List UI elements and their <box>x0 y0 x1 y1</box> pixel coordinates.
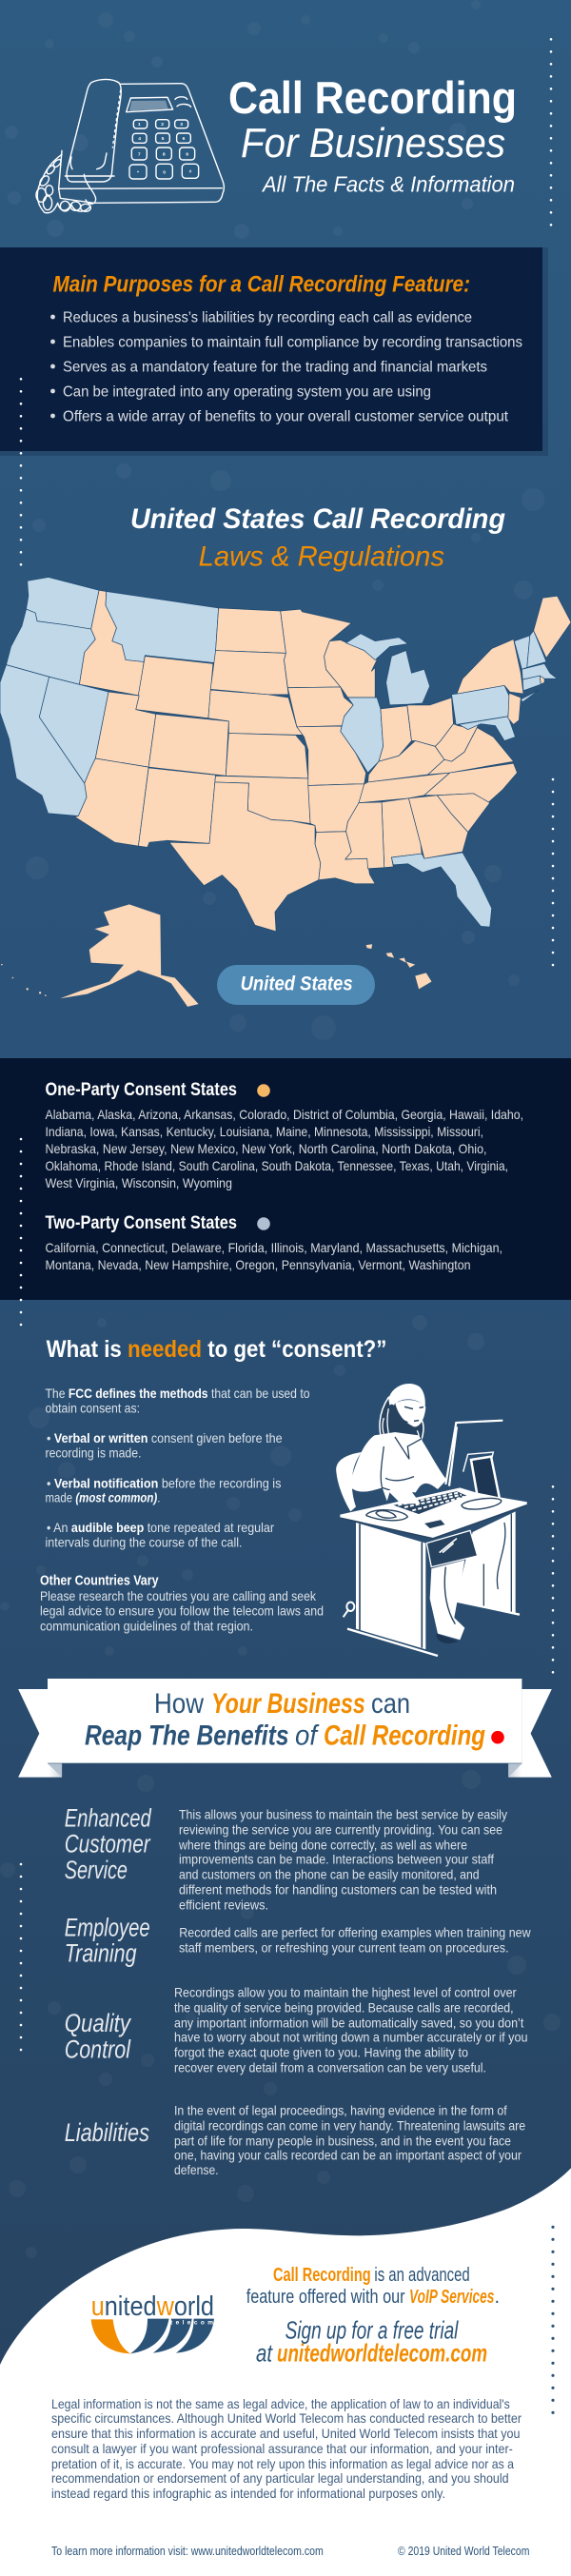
text block: other countries: Other Countries Vary <box>40 1574 158 1589</box>
legal disclaimer: specific circumstances. Although United World Telecom has conducted research to better <box>51 2410 522 2426</box>
benefit: quality control: have to worry about not writing down a number accurately or if you <box>174 2029 527 2044</box>
title: For Businesses <box>241 120 505 167</box>
panel: main purposes <box>0 247 548 456</box>
keypad: * <box>137 169 139 175</box>
two-party heading: Two-Party Consent States <box>46 1213 237 1233</box>
skirt and legs <box>426 1530 478 1643</box>
heading: consent: What is needed to get “consent?” <box>47 1336 386 1363</box>
keypad: 6 <box>183 136 186 142</box>
call to action: VoIP Services <box>409 2287 494 2308</box>
legal disclaimer: instead regard this infographic as intended for informational purposes only. <box>51 2486 445 2501</box>
benefit: quality control: the quality of service being provided. Because calls are recorded, <box>174 1999 514 2015</box>
coiled cord <box>36 154 96 213</box>
benefit: enhanced customer service: Service <box>65 1856 128 1884</box>
pill label: United States <box>217 965 375 1005</box>
heading: US laws: Laws & Regulations <box>199 541 444 573</box>
pill label: United States: United States <box>241 973 353 995</box>
Alaska <box>60 904 199 1007</box>
benefit: quality control: Recordings allow you to maintain the highest level of control over <box>174 1984 517 1999</box>
text block: FCC methods: • Verbal or written consent given before the <box>47 1430 283 1445</box>
map of United States <box>0 577 571 1007</box>
heading: US laws: United States Call Recording <box>130 503 505 535</box>
text block: other countries: communication guidelines of that region. <box>40 1618 253 1633</box>
text block: other countries: Please research the coutries you are calling and seek <box>40 1588 317 1603</box>
benefit: employee training <box>65 1913 531 1968</box>
title: Call Recording <box>228 72 517 123</box>
two-party list <box>46 1240 502 1272</box>
icon: desk telephone <box>36 79 224 213</box>
Hawaii <box>366 944 431 989</box>
legal disclaimer: ensure that this information is accurate and useful, United World Telecom insists that you <box>51 2426 520 2441</box>
banner heading: Your Business <box>211 1688 365 1720</box>
text block: FCC methods: • Verbal notification before the recording is <box>47 1475 281 1490</box>
small desk item <box>344 1603 354 1617</box>
text block: FCC methods <box>46 1386 310 1550</box>
woman <box>349 1384 446 1504</box>
banner heading: How <box>154 1688 204 1720</box>
one-party list: Nebraska, New Jersey, New Mexico, New York, North Carolina, North Dakota, Ohio, <box>46 1141 487 1156</box>
two-party list: California, Connecticut, Delaware, Florida, Illinois, Maryland, Massachusetts, Michigan, <box>46 1240 502 1255</box>
keypad: 8 <box>163 151 166 157</box>
bullet list: Serves as a mandatory feature for the trading and financial markets <box>63 359 487 375</box>
keypad: 0 <box>163 169 166 175</box>
bullet list: Can be integrated into any operating system you are using <box>63 383 431 400</box>
monitor <box>445 1421 502 1505</box>
text block: FCC methods: obtain consent as: <box>46 1400 140 1415</box>
illustration: woman at desk <box>336 1384 527 1656</box>
keypad: 9 <box>186 151 188 157</box>
keypad <box>129 120 199 179</box>
red dot <box>491 1731 504 1743</box>
call to action: Call Recording <box>273 2265 371 2286</box>
keypad: # <box>189 169 192 175</box>
logo: United World Telecom <box>91 2291 214 2353</box>
panel heading: Main Purposes for a Call Recording Feature: <box>53 272 470 298</box>
legal disclaimer <box>51 2396 522 2501</box>
benefit: liabilities: In the event of legal proceedings, having evidence in the form of <box>174 2102 507 2117</box>
panel: consent states <box>0 1058 571 1300</box>
benefit: enhanced customer service: Enhanced <box>65 1803 152 1832</box>
benefit: liabilities: Liabilities <box>65 2118 149 2147</box>
keypad: 7 <box>138 151 141 157</box>
benefit: liabilities: digital recordings can come in very handy. Threatening lawsuits are <box>174 2117 525 2133</box>
benefit: liabilities: part of life for many people in business, and in the event you face <box>174 2133 511 2148</box>
benefit: quality control <box>65 1984 527 2075</box>
display screen <box>127 97 173 112</box>
benefit: employee training: staff members, or refreshing your current team on procedures. <box>179 1939 509 1955</box>
benefit: employee training: Employee <box>65 1913 150 1941</box>
legal disclaimer: Legal information is not the same as legal advice, the application of law to an individual's <box>51 2396 510 2411</box>
text block: FCC methods: intervals during the course of the call. <box>46 1535 242 1550</box>
white wave footer <box>0 2168 571 2576</box>
benefit: liabilities: defense. <box>174 2162 219 2177</box>
benefit: enhanced customer service: reviewing the service you are currently providing. You can see <box>179 1821 502 1837</box>
benefit: enhanced customer service: and customers on the phone can be easily monitored, and <box>179 1866 480 1881</box>
benefit: enhanced customer service <box>65 1803 507 1912</box>
bullet list: Reduces a business’s liabilities by recording each call as evidence <box>63 309 472 325</box>
banner heading: Reap The Benefits <box>85 1720 289 1751</box>
title <box>228 72 517 197</box>
one-party list: West Virginia, Wisconsin, Wyoming <box>46 1175 232 1190</box>
bullet list: Enables companies to maintain full compliance by recording transactions <box>63 334 522 350</box>
benefit: quality control: Quality <box>65 2009 131 2037</box>
benefit: liabilities: one, having your calls recorded can be an important aspect of your <box>174 2147 522 2162</box>
banner heading: can <box>371 1688 410 1720</box>
heading: US laws <box>130 503 505 573</box>
call to action: is an advanced <box>374 2265 470 2286</box>
call to action: unitedworldtelecom.com <box>277 2339 487 2368</box>
banner <box>18 1679 552 1778</box>
benefit: enhanced customer service: different methods for handling customers can be tested with <box>179 1881 497 1897</box>
call to action: Sign up for a free trial <box>286 2316 459 2345</box>
legal disclaimer: pretation of it, is accurate. You may not rely upon this information as legal advice nor as a <box>51 2456 514 2471</box>
one-party list <box>46 1107 523 1190</box>
banner heading <box>85 1688 485 1751</box>
keypad: 2 <box>161 122 164 128</box>
keypad: 1 <box>138 122 141 128</box>
text block: FCC methods: recording is made. <box>46 1445 141 1461</box>
call to action: feature offered with our <box>246 2287 405 2308</box>
benefit: quality control: recover every detail from a conversation can be very useful. <box>174 2059 486 2075</box>
keypad: 4 <box>138 136 141 142</box>
call to action: at <box>256 2339 273 2368</box>
phone base <box>59 84 224 203</box>
call to action <box>246 2265 500 2368</box>
call to action: . <box>495 2287 500 2308</box>
benefit: liabilities <box>65 2102 525 2177</box>
benefit: enhanced customer service: efficient reviews. <box>179 1897 268 1912</box>
text block: other countries <box>40 1574 324 1633</box>
benefit: quality control: Control <box>65 2035 131 2063</box>
logo: United World Telecom: telecom <box>170 2320 213 2327</box>
text block: FCC methods: • An audible beep tone repeated at regular <box>47 1520 274 1535</box>
legal disclaimer: recommendation or endorsement of any particular legal understanding, and you should <box>51 2470 509 2486</box>
benefit: employee training: Training <box>65 1939 137 1968</box>
chair <box>336 1452 362 1511</box>
benefit: quality control: any important information will be automatically saved, so you don’t <box>174 2015 523 2030</box>
text block: FCC methods: made (most common). <box>46 1490 160 1505</box>
footer: To learn more information visit: www.unitedworldtelecom.com <box>51 2544 324 2558</box>
bullet list <box>50 309 522 424</box>
bullet list: Offers a wide array of benefits to your overall customer service output <box>63 408 509 424</box>
one-party heading: One-Party Consent States <box>46 1080 237 1100</box>
handset <box>67 79 121 182</box>
banner heading: of <box>295 1720 319 1751</box>
banner heading: Call Recording <box>324 1720 485 1751</box>
ribbon tails <box>18 1689 552 1778</box>
benefit: enhanced customer service: improvements can be made. Interactions between your staff <box>179 1851 494 1866</box>
logo: United World Telecom: unitedworld <box>91 2291 214 2322</box>
two-party list: Montana, Nevada, New Hampshire, Oregon, Pennsylvania, Vermont, Washington <box>46 1257 470 1272</box>
benefit: quality control: forgot the exact quote given to you. Having the ability to <box>174 2044 468 2059</box>
benefit: enhanced customer service: Customer <box>65 1830 150 1858</box>
keypad: 5 <box>162 136 165 142</box>
legal disclaimer: consult a lawyer if you want professional assurance that our information, and your inter- <box>51 2441 513 2456</box>
keypad: 3 <box>180 122 183 128</box>
benefit: enhanced customer service: This allows your business to maintain the best service by easily <box>179 1806 507 1821</box>
benefit: employee training: Recorded calls are perfect for offering examples when training new <box>179 1924 531 1939</box>
text block: other countries: legal advice to ensure you follow the telecom laws and <box>40 1603 324 1618</box>
one-party list: Indiana, Iowa, Kansas, Kentucky, Louisiana, Maine, Minnesota, Mississippi, Missouri, <box>46 1124 483 1139</box>
text block: FCC methods: The FCC defines the methods that can be used to <box>46 1386 310 1401</box>
desk <box>340 1487 527 1656</box>
footer: © 2019 United World Telecom <box>398 2544 529 2558</box>
title: All The Facts & Information <box>261 172 515 197</box>
benefit: enhanced customer service: where things are being done correctly, as well as where <box>178 1837 467 1852</box>
one-party list: Oklahoma, Rhode Island, South Carolina, South Dakota, Tennessee, Texas, Utah, Virginia, <box>46 1158 508 1173</box>
